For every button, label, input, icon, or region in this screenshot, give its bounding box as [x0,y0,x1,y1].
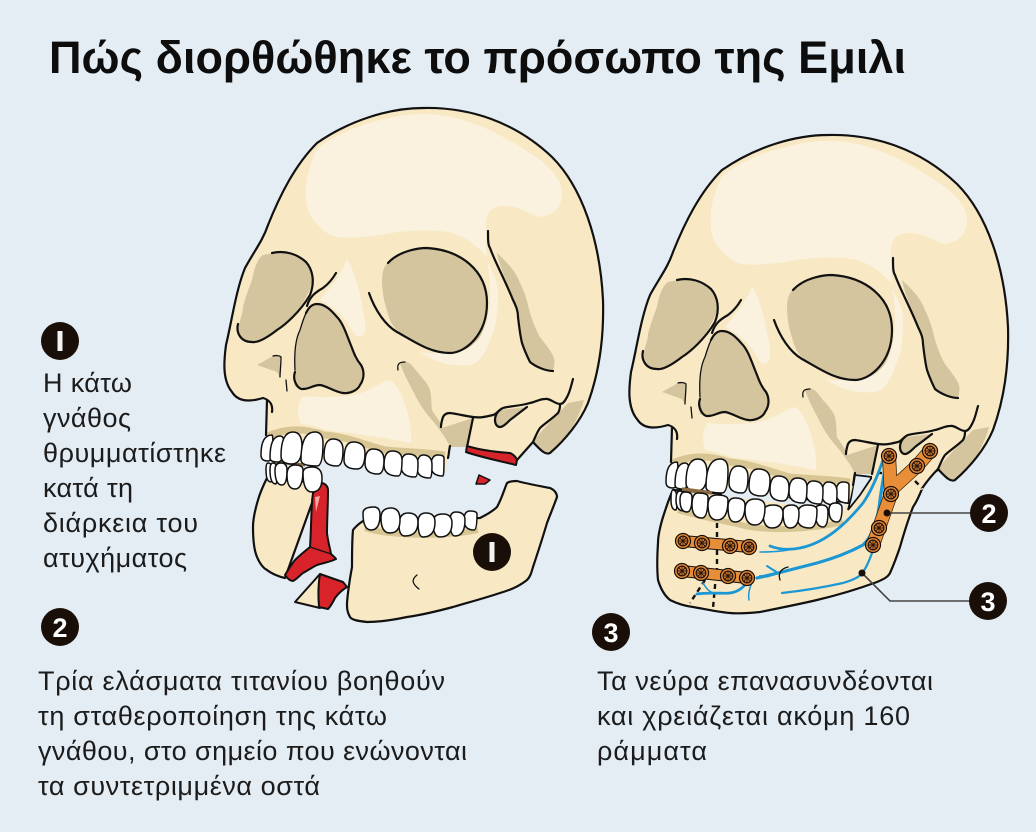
lower jaw main fragment [347,481,557,622]
lower teeth [671,490,842,528]
gap behind jaw [848,475,872,510]
step 3 text: και χρειάζεται ακόμη 160 [597,701,910,731]
callout 3 leader and badge [858,570,1007,620]
skull cranium and upper teeth [224,108,603,478]
step 3 badge [592,613,630,651]
step 2 badge [41,608,79,646]
jaw outer edge [923,469,938,487]
step 3 text [597,666,933,766]
illustration: fractured skull [224,108,603,622]
fracture dashes [690,473,922,608]
skull cranium and upper teeth [629,135,1008,505]
step 2 text: Τρία ελάσματα τιτανίου βοηθούν [38,666,445,696]
lower jaw front fragment with fracture [253,462,336,581]
jaw badge 1 [473,533,511,571]
fractured ramus edge [466,446,517,465]
step 3 text: Τα νεύρα επανασυνδέονται [597,666,933,696]
step 1 text: ατυχήματος [43,543,187,573]
repaired lower jaw [657,470,938,613]
step 2 text: γνάθου, στο σημείο που ενώνονται [38,736,467,766]
step 2 text: τη σταθεροποίηση της κάτω [38,701,387,731]
callout 3 leader and badge: 3 [980,587,996,617]
step 1 text: θρυμματίστηκε [43,438,226,468]
nerves [697,455,887,600]
small bone chip [476,475,490,484]
step 1 text: κατά τη [43,473,133,503]
step 2 badge: 2 [52,613,68,643]
step 2 text: τα συντετριμμένα οστά [38,771,320,801]
step 1 text: Η κάτω [43,368,132,398]
callout 2 leader and badge [884,494,1008,532]
title: Πώς διορθώθηκε το πρόσωπο της Εμιλι [49,32,906,83]
step 3 text: ράμματα [597,736,707,766]
step 2 text [38,666,467,801]
step 3 badge: 3 [603,618,619,648]
step 1 text: διάρκεια του [43,508,198,538]
titanium plate: Y-shaped on jaw angle [866,444,938,552]
titanium plate: lower chin [674,564,754,586]
illustration: repaired skull [629,135,1008,613]
brown gum between teeth [682,489,712,493]
step 1 text [43,368,226,573]
ramus line [517,442,533,460]
titanium plate: upper chin [676,534,756,554]
callout 2 leader and badge: 2 [981,499,997,529]
step 1 text: γνάθος [43,403,131,433]
step 1 badge [41,322,79,360]
broken chin fragment [295,574,347,609]
gum shadow [678,510,843,529]
gap between tooth rows [722,494,845,506]
